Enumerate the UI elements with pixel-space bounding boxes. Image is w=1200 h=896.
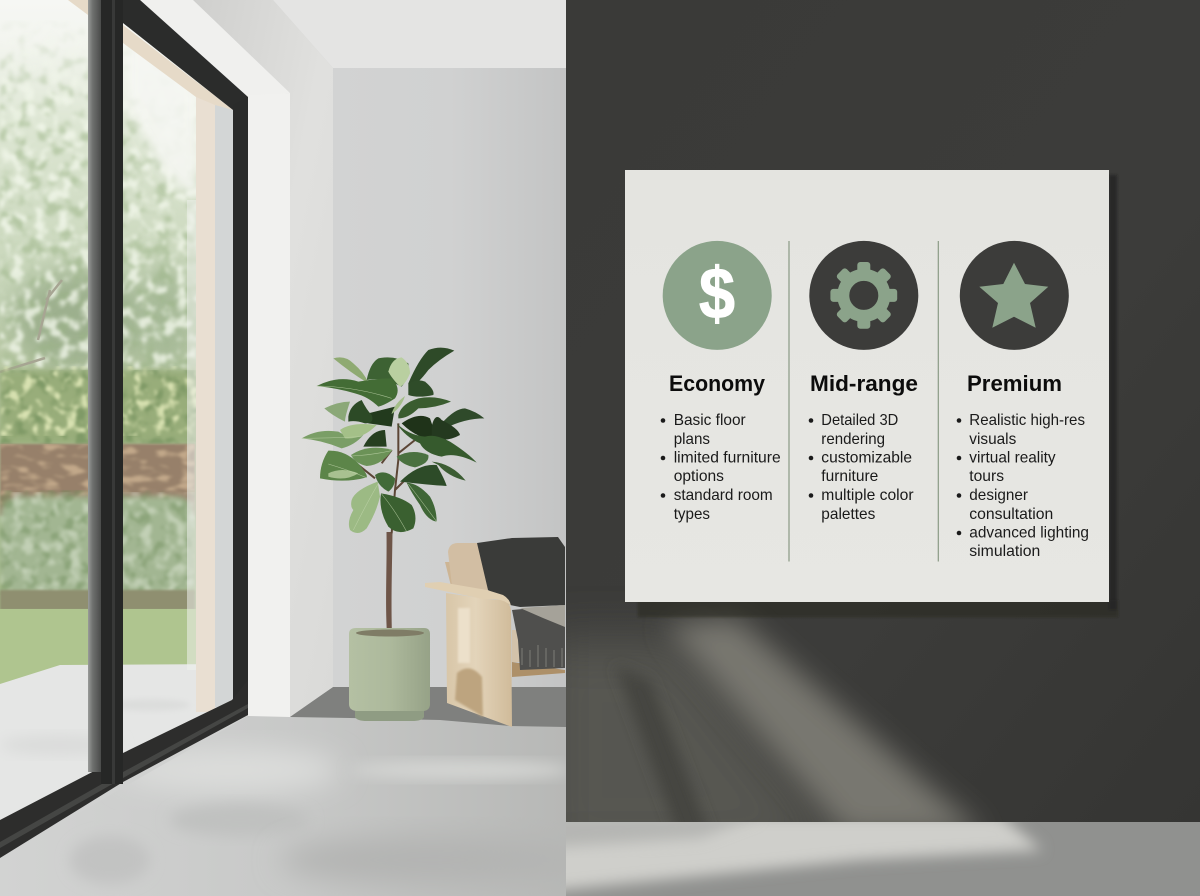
right jamb [233,97,248,715]
list: Mid-range features: Detailed 3D [821,412,898,429]
center mullion [88,0,101,772]
back cushion [448,543,488,592]
list: Economy features [661,412,781,523]
list: Economy features: types [674,506,710,523]
icon: gear [809,241,918,350]
list: Mid-range features: palettes [821,506,875,523]
fiddle leaf fig plant [302,348,484,634]
back wall [333,68,566,690]
list: Mid-range features: customizable [821,450,912,466]
side panel [446,593,512,727]
lawn [0,609,196,684]
trunk [386,532,392,634]
list: Mid-range features: multiple color [821,487,914,504]
heading: Premium: Premium [967,371,1062,396]
list: Mid-range features: rendering [821,431,885,448]
bottom rail [0,680,248,858]
icon: dollar: $ [699,254,735,334]
window reveal soffit [140,0,290,97]
floor light and shadow [70,687,580,884]
room background [0,0,566,896]
pale window edge [187,200,196,670]
list: Premium features: virtual reality [969,450,1056,466]
list: Economy features: plans [674,431,710,448]
mid leaves [367,357,409,387]
wooden armchair [425,537,565,727]
heading: Mid-range: Mid-range [810,371,918,396]
side wall [193,0,333,717]
pale glass reflection [215,95,233,707]
window reveal jamb [248,93,290,717]
icon: star [960,241,1069,350]
sky in upper right pane [123,36,200,200]
column: Economy [661,241,781,523]
stone wall [0,444,195,516]
back frame [445,562,453,586]
list: Premium features: advanced lighting [969,524,1089,542]
branches [358,423,415,533]
floor in front of dark wall [566,822,1200,896]
dark wall [566,612,980,822]
wood column outside [196,90,215,712]
charcoal throw blanket [477,537,565,607]
tree foliage [0,20,200,375]
wood header [123,25,233,110]
list: Economy features: limited furniture [674,450,781,466]
top rail of right pane [123,0,248,110]
list: Premium features: tours [969,468,1004,485]
dark back leaves [408,348,454,388]
list: Economy features: options [674,468,724,485]
armrest [425,582,511,606]
window view: garden [0,0,233,830]
column: Premium [957,241,1089,560]
poster panel [625,170,1109,602]
plant pot [349,628,430,721]
light shafts [566,612,983,822]
list: Premium features: simulation [969,543,1040,560]
sunlight patch [458,608,470,663]
hedge [0,366,200,444]
seat rail [512,662,565,677]
list: Premium features: designer [969,487,1028,504]
throw lower [512,605,565,670]
low shrubs [0,490,195,610]
list: Premium features [957,412,1089,560]
panel shadow [638,175,1118,617]
window frame [0,0,248,858]
list: Mid-range features [809,412,914,523]
list: Premium features: Realistic high-res [969,412,1085,429]
list: Premium features: consultation [969,506,1053,523]
icon: dollar [663,241,772,350]
seat cushion [512,630,520,662]
shadow on panel [455,668,483,717]
concrete floor [0,687,566,896]
list: Premium features: visuals [969,431,1016,448]
heading: Economy: Economy [669,371,766,396]
midribs [302,386,437,532]
wood wedge in left pane [68,0,88,15]
column: Mid-range [809,241,918,523]
list: Mid-range features: furniture [821,468,878,485]
patio [0,664,217,820]
lower leaves [380,493,415,532]
ceiling [273,0,566,68]
divider lines [789,241,938,562]
foliage [302,348,484,533]
list: Economy features: Basic floor [674,412,746,429]
list: Economy features: standard room [674,487,773,504]
